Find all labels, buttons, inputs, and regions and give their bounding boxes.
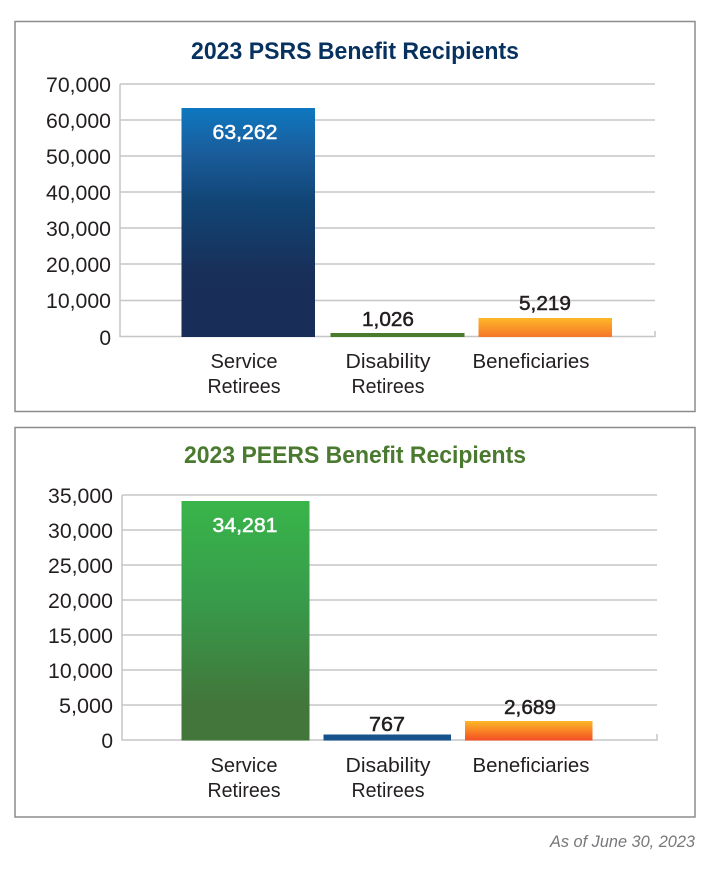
PEERS bar chart [48, 485, 657, 802]
PEERS y axis labels: 20,000 [48, 590, 113, 613]
PSRS y axis labels: 60,000 [46, 110, 111, 133]
PSRS y axis labels: 40,000 [46, 182, 111, 205]
PEERS y axis labels: 10,000 [48, 660, 113, 683]
PEERS value labels: 34,281 [212, 515, 278, 537]
PSRS bar: disability retirees [330, 333, 464, 337]
PSRS value labels: 1,026 [362, 309, 414, 331]
panel: PSRS benefit recipients [15, 22, 695, 412]
PEERS y axis labels: 30,000 [48, 520, 113, 543]
PEERS category labels: Service [210, 755, 278, 777]
PSRS value labels [212, 122, 571, 331]
PEERS bar: beneficiaries [465, 721, 592, 740]
PEERS value labels [212, 515, 556, 736]
PEERS bar: disability retirees [324, 734, 451, 740]
PSRS y axis labels: 20,000 [46, 254, 111, 277]
PEERS title: 2023 PEERS Benefit Recipients [184, 442, 526, 469]
PSRS category labels: Retirees [352, 376, 424, 398]
PSRS value labels: 5,219 [519, 293, 571, 315]
PSRS category labels: Beneficiaries [472, 351, 590, 373]
PSRS category labels: Disability [346, 351, 430, 373]
PEERS value labels: 2,689 [504, 697, 556, 719]
PSRS value labels: 63,262 [212, 122, 278, 144]
PEERS value labels: 767 [369, 714, 405, 736]
PEERS y axis labels: 35,000 [48, 485, 113, 508]
PSRS y axis labels [46, 74, 111, 350]
PEERS category labels: Beneficiaries [472, 755, 590, 777]
PSRS y axis labels: 0 [99, 327, 111, 350]
as-of date note: As of June 30, 2023 [549, 833, 696, 851]
PEERS category labels [208, 755, 590, 802]
panel: PEERS benefit recipients [15, 428, 695, 817]
PEERS category labels: Disability [346, 755, 430, 777]
PSRS category labels: Retirees [208, 376, 280, 398]
PEERS y axis labels: 5,000 [59, 695, 113, 718]
PEERS y axis labels [48, 485, 113, 753]
PSRS y axis labels: 30,000 [46, 218, 111, 241]
PSRS bar: beneficiaries [478, 318, 612, 337]
PEERS y axis labels: 15,000 [48, 625, 113, 648]
PEERS bar: service retirees [182, 501, 310, 740]
PSRS category labels: Service [210, 351, 278, 373]
PSRS y axis labels: 10,000 [46, 290, 111, 313]
PSRS y axis labels: 50,000 [46, 146, 111, 169]
PEERS y axis labels: 0 [101, 730, 113, 753]
PSRS y axis labels: 70,000 [46, 74, 111, 97]
PSRS title: 2023 PSRS Benefit Recipients [191, 38, 519, 65]
PSRS bar chart [46, 74, 655, 398]
PSRS bar: service retirees [182, 108, 315, 337]
PEERS y axis labels: 25,000 [48, 555, 113, 578]
PEERS category labels: Retirees [208, 780, 280, 802]
PEERS category labels: Retirees [352, 780, 424, 802]
PSRS category labels [208, 351, 590, 398]
